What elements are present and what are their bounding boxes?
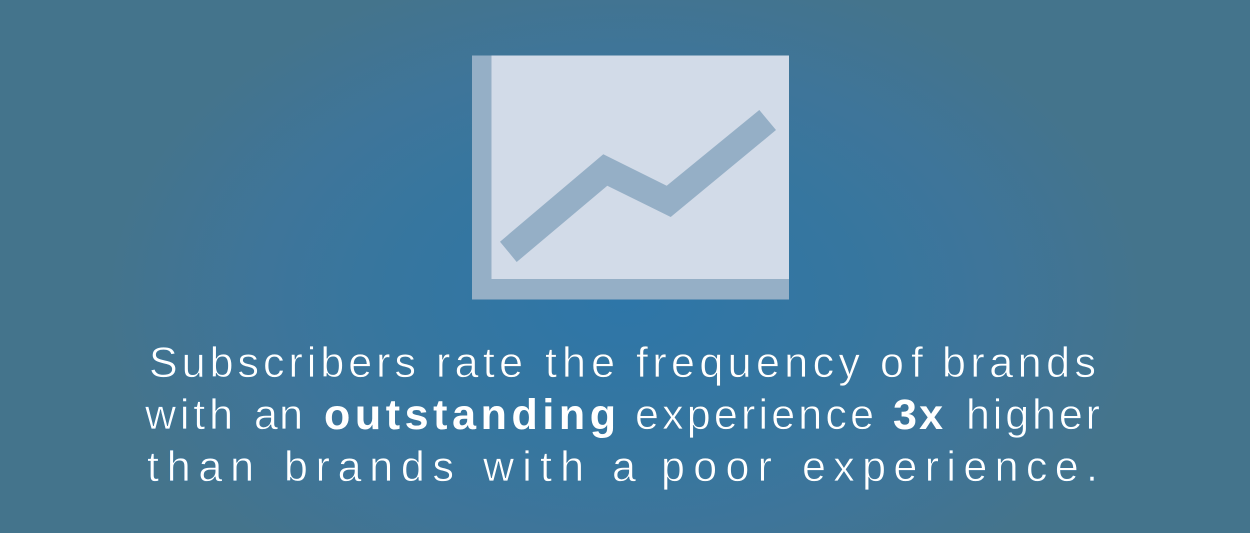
chart axes — [472, 56, 789, 300]
line 3: brands — [284, 443, 454, 491]
line 2: 3x — [893, 391, 943, 439]
line 1: of — [880, 339, 924, 387]
line 2: higher — [966, 391, 1100, 439]
line 1: rate — [436, 339, 523, 387]
line 3: with — [482, 443, 584, 491]
line 3: a — [612, 443, 636, 491]
chart trend line — [500, 110, 776, 262]
line 3 — [147, 443, 1098, 491]
line 1: the — [545, 339, 615, 387]
line 1: brands — [942, 339, 1096, 387]
icon: line chart — [472, 56, 789, 300]
line 1: frequency — [636, 339, 860, 387]
line 1 — [149, 339, 1096, 387]
line 2: an — [254, 391, 303, 439]
line 2 — [144, 391, 1100, 439]
line 3: experience. — [802, 443, 1098, 491]
chart plot area — [492, 56, 789, 279]
line 2: experience — [635, 391, 874, 439]
line 3: poor — [661, 443, 772, 491]
line 3: than — [147, 443, 254, 491]
line 2: with — [144, 391, 233, 439]
statement text — [144, 339, 1100, 491]
line 1: Subscribers — [149, 339, 416, 387]
line 2: outstanding — [324, 391, 616, 439]
